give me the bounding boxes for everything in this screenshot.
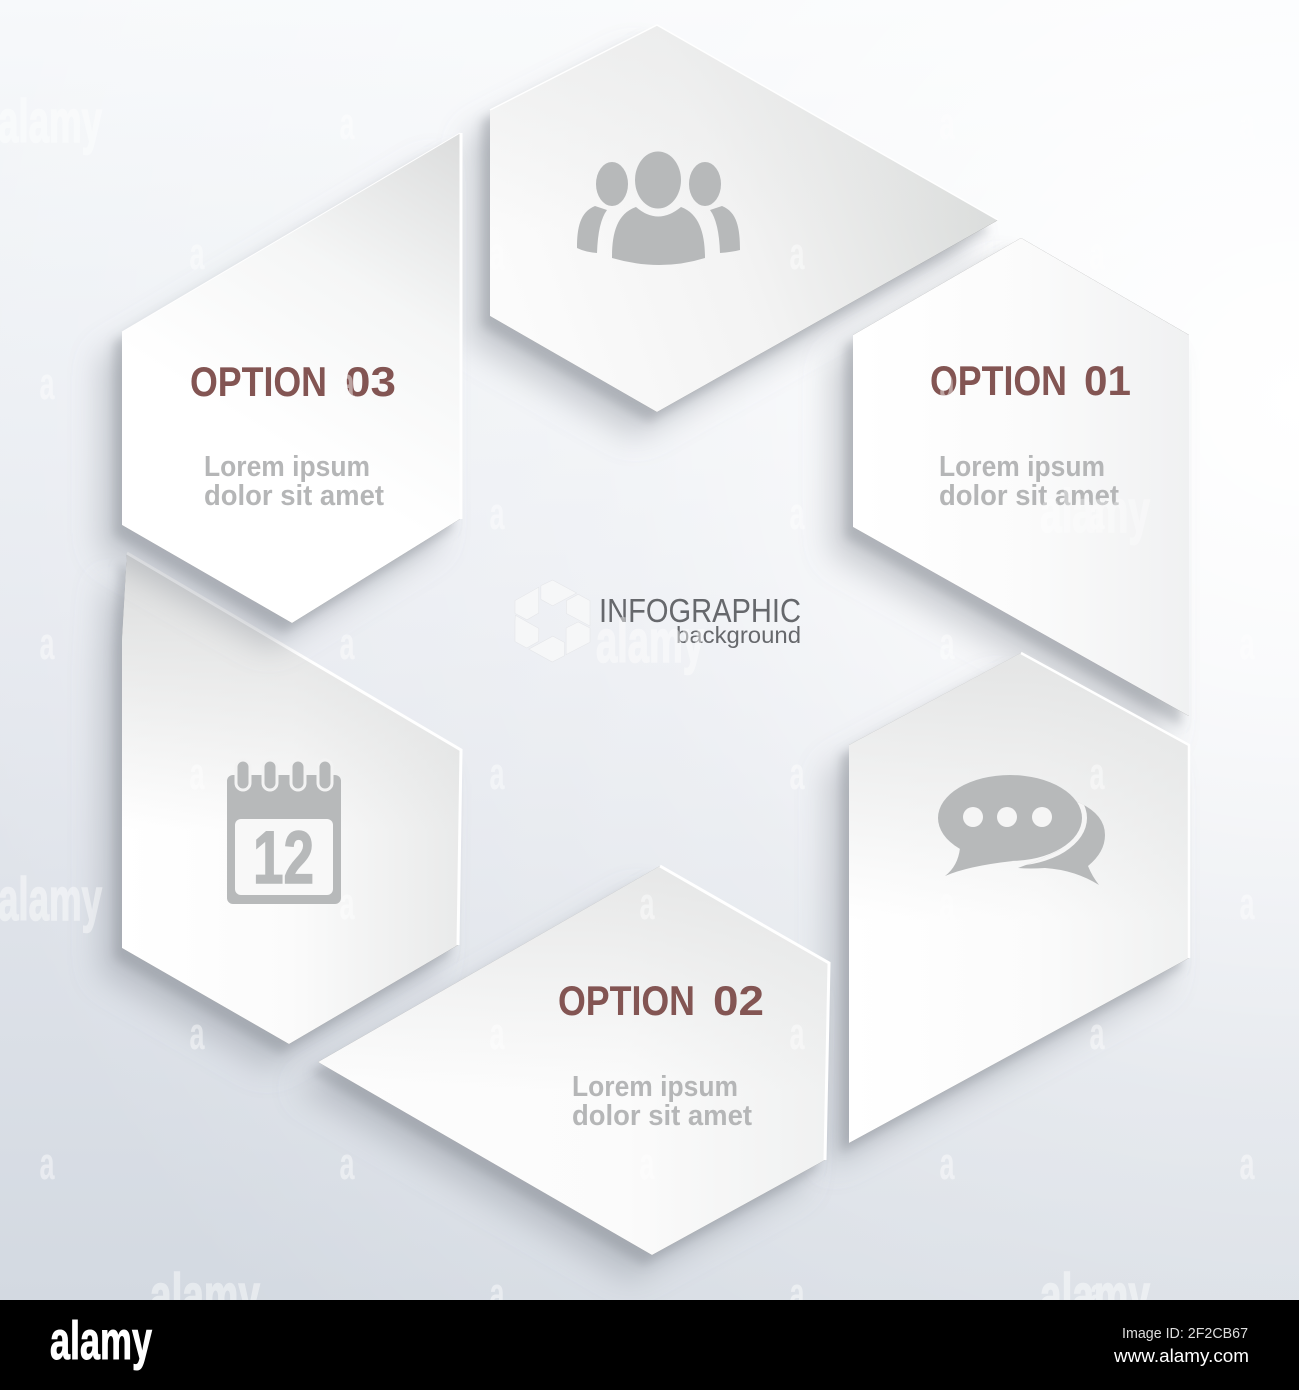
- text block: option 01 body: Lorem ipsum: [939, 451, 1105, 483]
- watermark overlay: a: [939, 618, 955, 669]
- watermark overlay: a: [789, 228, 805, 279]
- watermark overlay: a: [489, 488, 505, 539]
- icon: calendar: 12: [253, 816, 314, 899]
- text block: option 01 body: dolor sit amet: [939, 480, 1119, 512]
- watermark overlay: a: [489, 1268, 505, 1319]
- watermark overlay: a: [939, 98, 955, 149]
- watermark overlay: a: [789, 1008, 805, 1059]
- watermark overlay: a: [189, 488, 205, 539]
- watermark overlay: alamy: [0, 866, 102, 933]
- watermark overlay: a: [939, 878, 955, 929]
- watermark overlay: a: [789, 488, 805, 539]
- watermark overlay: a: [1089, 228, 1105, 279]
- text block: option 02 body: [572, 1071, 752, 1132]
- watermark overlay: a: [1089, 748, 1105, 799]
- watermark overlay: a: [189, 748, 205, 799]
- watermark overlay: a: [189, 228, 205, 279]
- watermark overlay: a: [939, 1138, 955, 1189]
- watermark overlay: a: [339, 358, 355, 409]
- watermark overlay: a: [339, 878, 355, 929]
- watermark overlay: a: [639, 1138, 655, 1189]
- watermark overlay: alamy: [150, 1262, 260, 1329]
- watermark overlay: a: [339, 1138, 355, 1189]
- panel: option 01 hexagon: [853, 238, 1189, 716]
- watermark overlay: a: [1089, 1008, 1105, 1059]
- watermark overlay: a: [489, 228, 505, 279]
- watermark overlay: a: [189, 1008, 205, 1059]
- heading: option 02: OPTION: [558, 977, 695, 1024]
- text block: option 01 body: [939, 451, 1119, 512]
- icon: speech bubbles: [933, 770, 1105, 885]
- footer logo: alamy: [50, 1311, 152, 1371]
- footer bar: [0, 1300, 1299, 1390]
- icon: calendar: [227, 760, 341, 904]
- text block: option 03 body: [204, 451, 384, 512]
- watermark overlay: a: [489, 1008, 505, 1059]
- text block: option 02 body: Lorem ipsum: [572, 1071, 738, 1103]
- watermark overlay: a: [939, 358, 955, 409]
- watermark overlay: a: [1089, 1268, 1105, 1319]
- website: www.alamy.com: [1113, 1346, 1249, 1366]
- watermark overlay: a: [1239, 358, 1255, 409]
- subheading: background: background: [676, 622, 801, 648]
- heading: option 02: 02: [713, 977, 764, 1024]
- panel: people hexagon: [490, 25, 998, 412]
- watermark overlay: a: [1239, 98, 1255, 149]
- heading: option 01: OPTION: [930, 357, 1067, 404]
- watermark overlay: a: [1089, 488, 1105, 539]
- heading: option 01: 01: [1084, 357, 1131, 404]
- watermark overlay: a: [1239, 878, 1255, 929]
- centre logo: [515, 580, 801, 662]
- panel: option 02 hexagon: [318, 866, 829, 1255]
- heading: option 03: 03: [345, 358, 396, 405]
- watermark overlay: alamy: [1040, 1262, 1150, 1329]
- watermark overlay: alamy: [596, 608, 704, 675]
- icon: people: [577, 151, 740, 265]
- watermark overlay: a: [339, 618, 355, 669]
- icon: small hexagon ring: [515, 580, 590, 662]
- watermark overlay: a: [789, 748, 805, 799]
- text block: option 03 body: Lorem ipsum: [204, 451, 370, 483]
- watermark overlay: a: [39, 618, 55, 669]
- watermark overlay: a: [489, 748, 505, 799]
- panel: chat hexagon: [849, 653, 1189, 1143]
- text block: option 02 body: dolor sit amet: [572, 1100, 752, 1132]
- image id: Image ID: 2F2CB67: [1122, 1325, 1248, 1342]
- panel: calendar hexagon: [122, 553, 461, 1044]
- watermark overlay: a: [639, 878, 655, 929]
- watermark overlay: alamy: [0, 88, 102, 155]
- watermark overlay: a: [39, 1138, 55, 1189]
- watermark overlay: a: [339, 98, 355, 149]
- heading: option 03: OPTION: [190, 358, 327, 405]
- watermark overlay: a: [789, 1268, 805, 1319]
- watermark overlay: a: [1239, 1138, 1255, 1189]
- panel: option 03 hexagon: [122, 133, 461, 623]
- text block: option 03 body: dolor sit amet: [204, 480, 384, 512]
- heading: infographic: INFOGRAPHIC: [599, 592, 801, 629]
- watermark overlay: a: [39, 358, 55, 409]
- watermark overlay: a: [1239, 618, 1255, 669]
- watermark overlay: alamy: [1040, 478, 1150, 545]
